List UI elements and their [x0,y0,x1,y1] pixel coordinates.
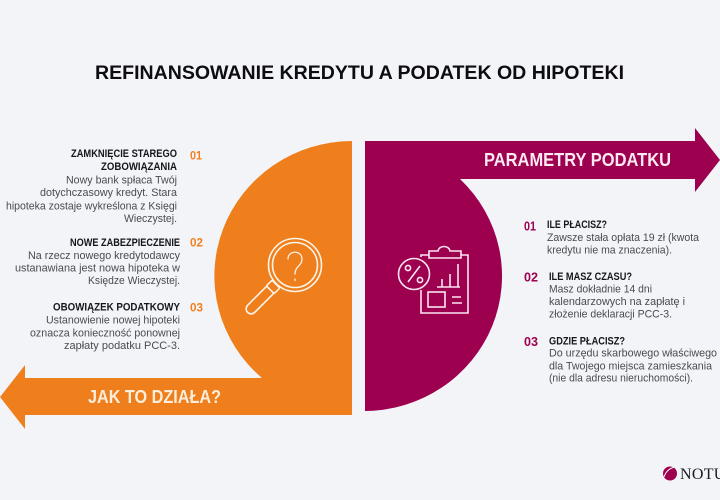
item 01 [524,219,700,256]
item 02: Księdze Wieczystej. [88,275,180,287]
orange half circle with left arrow [0,141,352,429]
item 02: ustanawiana jest nowa hipoteka w [15,262,180,274]
item 02: złożenie deklaracji PCC-3. [549,308,672,320]
item 01 [6,148,202,225]
item 01: 01 [190,148,202,162]
arrow label: JAK TO DZIAŁA? [88,387,221,407]
item 03 [524,335,717,384]
item 01: dotychczasowy kredyt. Stara [40,187,178,199]
magenta half circle with right arrow [365,128,720,411]
icon: clipboard with percent and chart [398,246,468,313]
item 02: Na rzecz nowego kredytodawcy [28,250,180,262]
panel: jak to działa [0,141,352,429]
item 01: Wieczystej. [124,213,177,225]
item 02: Masz dokładnie 14 dni [549,284,652,296]
item 01: ILE PŁACISZ? [547,219,607,231]
item 02 [15,236,203,287]
item 01: ZAMKNIĘCIE STAREGO [71,148,177,160]
item 03: oznacza konieczność ponownej [30,328,180,340]
item 03: 03 [524,335,538,349]
item 01: 01 [524,220,536,234]
item 01: kredytu nie ma znaczenia). [547,244,672,256]
item 03: dla Twojego miejsca zamieszkania [549,360,713,372]
item 02: kalendarzowych na zapłatę i [549,296,685,308]
item 03: OBOWIĄZEK PODATKOWY [53,302,181,314]
item 01: Nowy bank spłaca Twój [66,174,177,186]
item 02: NOWE ZABEZPIECZENIE [70,237,180,249]
item 03 [30,300,203,352]
item 03: Do urzędu skarbowego właściwego [549,348,717,360]
item 01: ZOBOWIĄZANIA [101,161,177,173]
item 03: GDZIE PŁACISZ? [549,336,625,348]
icon: magnifier with question mark [244,238,322,316]
item 03: 03 [190,300,203,314]
item 03: (nie dla adresu nieruchomości). [549,372,693,384]
panel: parametry podatku [365,128,720,411]
title: REFINANSOWANIE KREDYTU A PODATEK OD HIPOTEKI [95,63,624,84]
item 01: Zawsze stała opłata 19 zł (kwota [547,232,700,244]
item 02 [524,270,685,320]
item 03: Ustanowienie nowej hipoteki [46,314,180,326]
item 02: 02 [524,270,538,284]
item 03: zapłaty podatku PCC-3. [64,340,180,352]
item 02: 02 [190,236,203,250]
item 02: ILE MASZ CZASU? [549,271,632,283]
item 01: hipoteka zostaje wykreślona z Księgi [6,200,177,212]
arrow label: PARAMETRY PODATKU [484,150,671,170]
